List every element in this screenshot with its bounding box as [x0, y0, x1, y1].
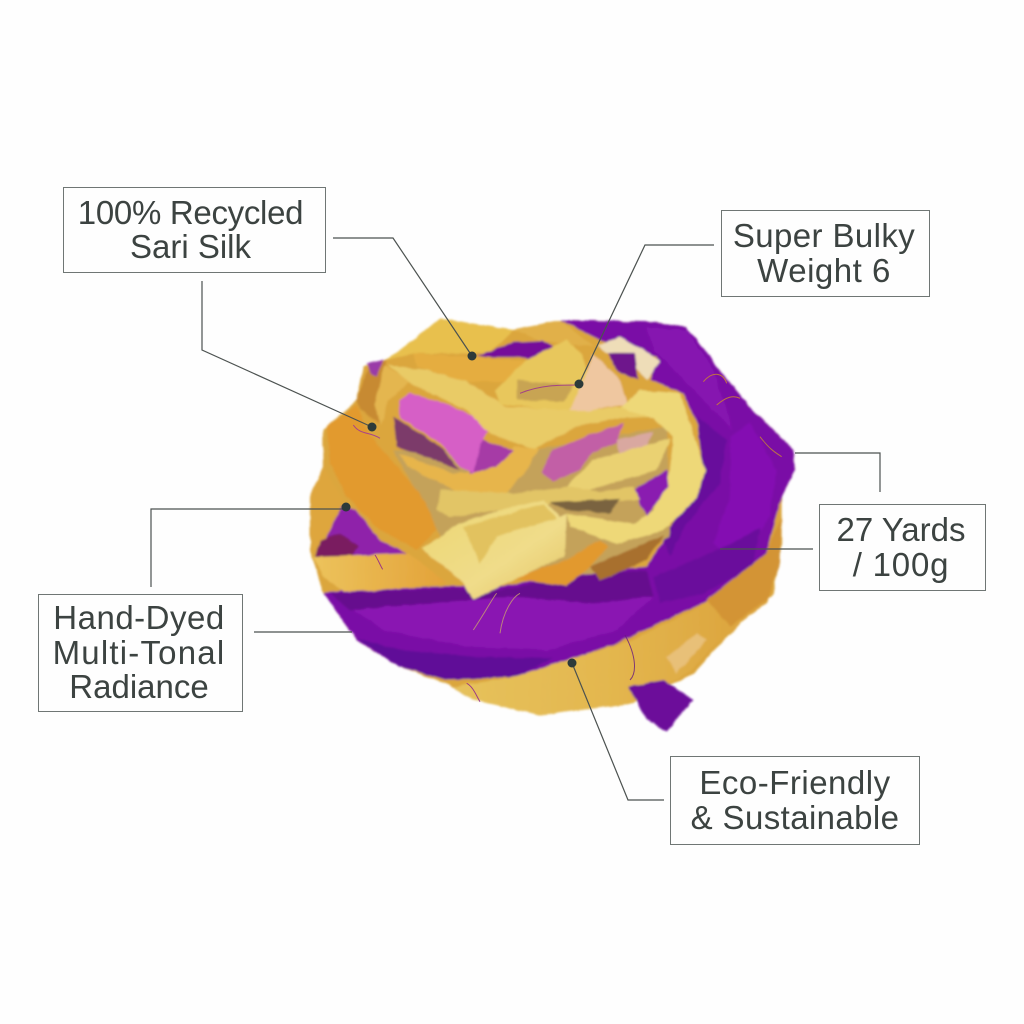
pink silk left: [399, 393, 492, 473]
top middle loop interior: [517, 380, 573, 402]
purple outer band: [323, 320, 795, 680]
left gold piece: [310, 467, 343, 553]
pink silk right: [542, 423, 623, 482]
purple bright strip top right: [647, 327, 733, 430]
leader: recycled sari silk to left of ball: [202, 281, 372, 427]
leader: 27 yards top: [795, 453, 880, 492]
pale worn patch lower right: [667, 633, 707, 673]
pale swirl top right: [598, 337, 660, 380]
orange ribbon lower: [513, 540, 608, 586]
leader: 27 yards middle: [720, 548, 813, 550]
orange leaf: [327, 405, 437, 549]
leader: super bulky: [579, 245, 714, 384]
orange fringe lower right: [707, 517, 782, 627]
brown strand: [590, 535, 665, 581]
label: hand-dyed multi-tonal radiance: Radiance: [69, 668, 209, 705]
purple dark lower band: [357, 638, 553, 680]
gold ribbon under pink: [400, 447, 538, 504]
gold low ribbon: [313, 553, 447, 592]
label: 100% recycled sari silk: Sari Silk: [130, 228, 251, 265]
middle yellow band: [437, 487, 640, 517]
top yellow ribbon: [387, 318, 513, 360]
label: 27 yards per 100g: / 100g: [853, 546, 949, 582]
middle pale ribbon: [567, 438, 671, 492]
top gold loop: [513, 320, 593, 347]
leader: hand-dyed top: [151, 509, 346, 587]
pale pink bits: [617, 432, 653, 457]
label: eco-friendly and sustainable: & Sustainable: [691, 798, 899, 836]
purple inside swirl: [608, 353, 638, 380]
top purple patch: [477, 340, 580, 367]
front folded ribbon: [422, 500, 567, 599]
label: 100% recycled sari silk: 100% Recycled: [78, 194, 303, 230]
purple dark upper edge: [330, 570, 653, 610]
interior mix: [393, 427, 670, 577]
label: super bulky weight 6: Super Bulky: [733, 217, 915, 254]
left purple patch: [315, 507, 410, 557]
label: hand-dyed multi-tonal radiance: [38, 594, 243, 712]
left yellow fold: [374, 365, 410, 425]
dark mottled patch left: [315, 533, 358, 558]
label: 27 yards per 100g: 27 Yards: [836, 511, 966, 548]
label: 27 yards per 100g: [819, 504, 986, 591]
label: 100% recycled sari silk: [63, 187, 326, 273]
dark gap mid: [550, 498, 620, 513]
small purple patch: [633, 470, 668, 516]
purple bright middle band: [343, 593, 653, 650]
leader dots: [342, 352, 584, 668]
label: super bulky weight 6: [721, 210, 930, 297]
right loop ribbon: [567, 390, 705, 544]
fold shadow: [463, 503, 557, 563]
purple bright strip right: [713, 423, 777, 563]
leader: recycled sari silk to top of ball: [333, 238, 472, 356]
yellow bottom ribbon: [453, 563, 777, 715]
purple dark strand right: [653, 527, 760, 603]
label: eco-friendly and sustainable: Eco-Friendly: [699, 764, 891, 801]
leader lines: [151, 238, 880, 800]
top middle loop: [495, 340, 593, 410]
purple dark patch right: [663, 417, 727, 557]
leader: eco-friendly: [572, 663, 664, 800]
label: eco-friendly and sustainable: [670, 756, 920, 845]
ball base silhouette: [310, 318, 795, 715]
leader: hand-dyed side: [254, 631, 352, 633]
left brown strip: [357, 360, 387, 423]
yellow ribbon main: [388, 365, 657, 449]
dark purple-red left: [393, 417, 460, 470]
pale peach ribbon: [570, 353, 627, 412]
label: hand-dyed multi-tonal radiance: Multi-Tonal: [53, 634, 225, 671]
loose fibres: [353, 374, 782, 702]
label: hand-dyed multi-tonal radiance: Hand-Dyed: [53, 599, 225, 636]
pink left shadow: [468, 438, 513, 474]
gold under ribbon: [413, 353, 557, 382]
label: super bulky weight 6: Weight 6: [757, 252, 891, 288]
purple tail: [628, 680, 693, 732]
small purple at top left: [367, 360, 383, 377]
